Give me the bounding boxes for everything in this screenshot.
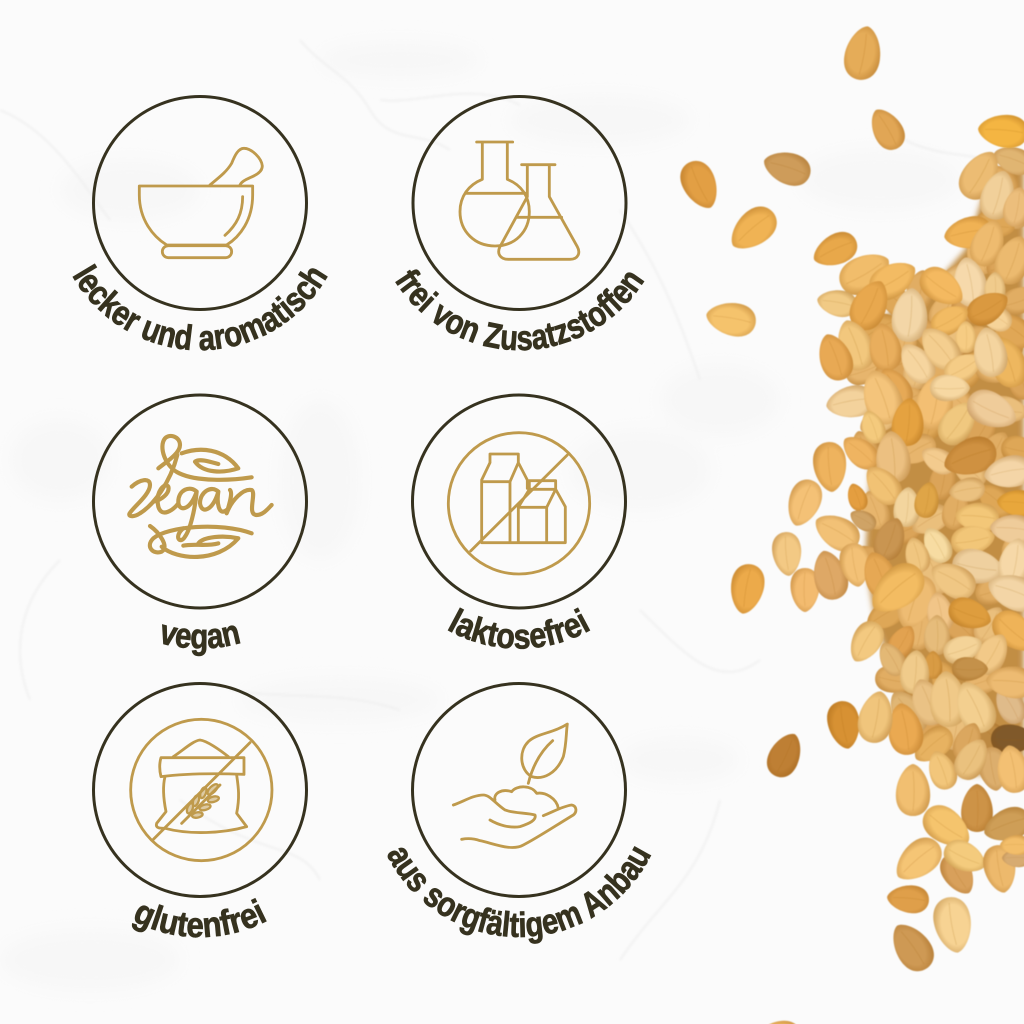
label: vegan — [162, 624, 240, 656]
label: frei von Zusatzstoffen — [395, 269, 644, 351]
label: aus sorgfältigem Anbau — [388, 846, 652, 944]
badge ring — [94, 684, 306, 896]
label: glutenfrei — [132, 898, 267, 938]
icon: crossed-out milk cartons — [448, 433, 590, 574]
badge: laktosefrei — [411, 394, 627, 650]
icon: crossed-out flour sack — [131, 719, 272, 861]
pile shadow base — [865, 160, 1024, 775]
badge ring — [94, 395, 306, 608]
icon: hand holding seedling — [453, 724, 576, 848]
badge ring — [94, 96, 306, 310]
badge ring — [413, 96, 626, 310]
badge: glutenfrei — [92, 682, 308, 938]
label: lecker und aromatisch — [72, 263, 328, 351]
icon: vegan lettering with leaves — [129, 436, 272, 557]
scattered loose sesame seeds — [674, 23, 1024, 1024]
label: laktosefrei — [448, 607, 590, 650]
badge: aus sorgfaeltigem Anbau — [388, 682, 652, 944]
badge: frei von Zusatzstoffen — [395, 95, 644, 351]
badge ring — [412, 395, 626, 608]
badge: vegan — [92, 394, 308, 656]
sesame seed pile — [771, 141, 1024, 795]
badge: lecker und aromatisch — [72, 95, 328, 351]
icon: laboratory flasks — [460, 142, 579, 259]
icon: mortar and pestle — [139, 148, 262, 258]
badge ring — [412, 684, 626, 896]
